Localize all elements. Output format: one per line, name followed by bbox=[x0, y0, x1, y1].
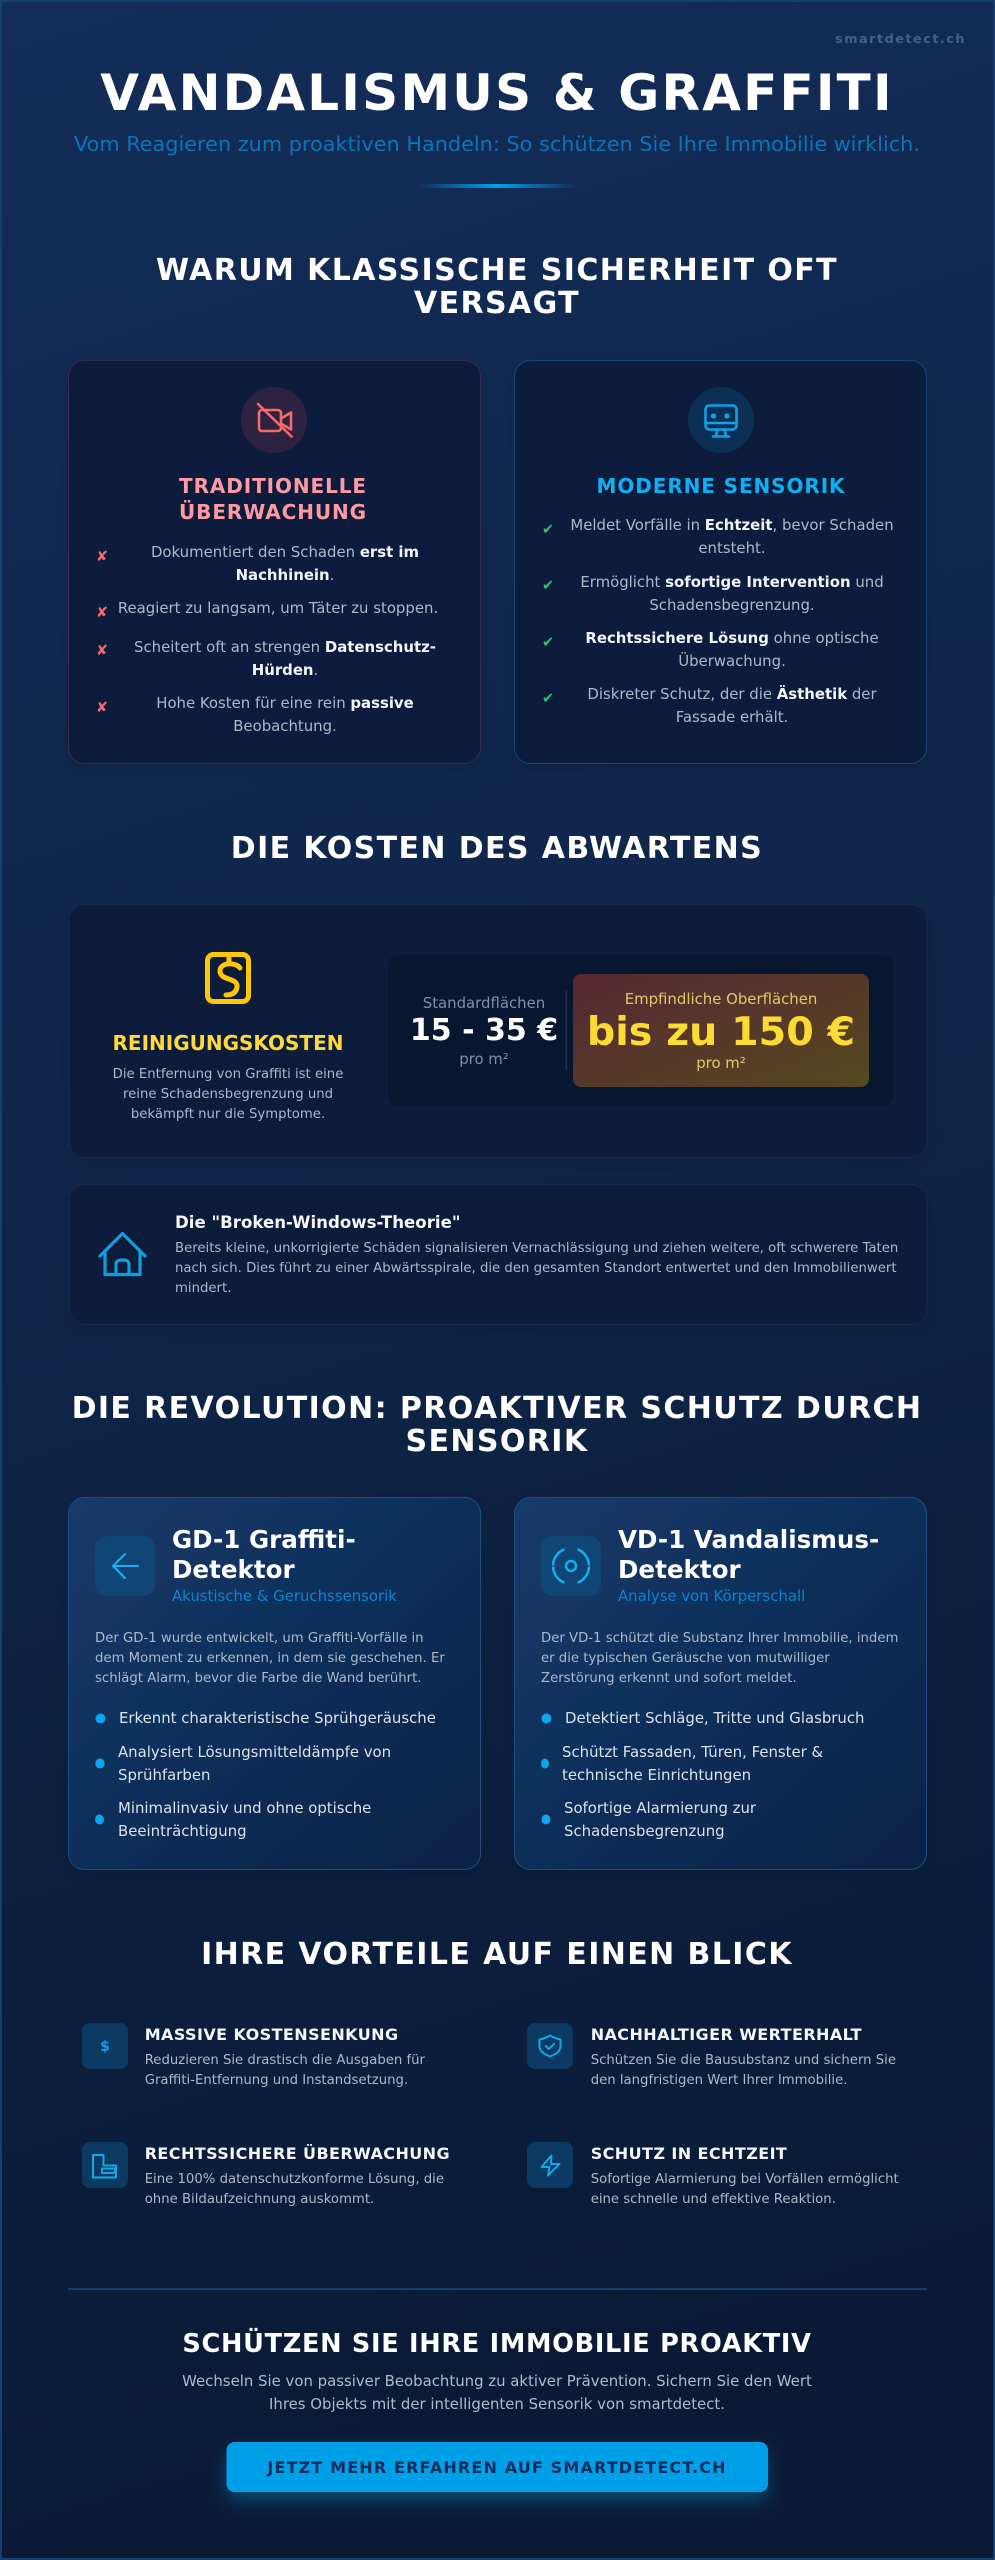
list: drawbacks: ✘ bbox=[96, 605, 108, 621]
theory text: nach sich. Dies führt zu einer Abwärtsspirale, die den gesamten Standort entwertet und den Immobilienwert bbox=[175, 1261, 897, 1276]
theory text bbox=[175, 1241, 898, 1296]
feature list: Sofortige Alarmierung zur bbox=[564, 1799, 757, 1817]
header divider bbox=[417, 184, 577, 188]
benefit: lasting value: Schützen Sie die Bausubstanz und sichern Sie bbox=[591, 2053, 896, 2068]
icon: vibration bbox=[541, 1536, 601, 1596]
feature list: Analysiert Lösungsmitteldämpfe von bbox=[118, 1743, 391, 1761]
icon: dollar: $ bbox=[100, 2039, 110, 2055]
standard surfaces bbox=[410, 994, 558, 1068]
list: advantages bbox=[542, 516, 894, 726]
theory text: mindert. bbox=[175, 1281, 231, 1296]
list: advantages: Fassade erhält. bbox=[676, 708, 788, 726]
benefit: legally compliant: Eine 100% datenschutzkonforme Lösung, die bbox=[145, 2172, 444, 2187]
theory title: Die "Broken-Windows-Theorie" bbox=[175, 1213, 460, 1232]
heading: why classic security fails: WARUM KLASSISCHE SICHERHEIT OFT bbox=[156, 253, 838, 288]
feature list bbox=[541, 1709, 864, 1840]
panel: VD-1 detector bbox=[514, 1498, 926, 1870]
standard surfaces: pro m² bbox=[459, 1050, 509, 1068]
icon: camera off bbox=[241, 387, 307, 453]
list: drawbacks: ✘ bbox=[96, 700, 108, 716]
benefit: lasting value bbox=[527, 2023, 896, 2088]
sensitive surfaces: pro m² bbox=[696, 1054, 746, 1072]
subtitle: Vom Reagieren zum proaktiven Handeln: So schützen Sie Ihre Immobilie wirklich. bbox=[74, 132, 920, 156]
panel: cleaning costs bbox=[69, 904, 927, 1158]
standard surfaces: 15 - 35 € bbox=[410, 1013, 558, 1048]
list: advantages: Meldet Vorfälle in Echtzeit, bevor Schaden bbox=[570, 516, 894, 534]
icon: arrow left bbox=[95, 1536, 155, 1596]
panel: traditional surveillance bbox=[68, 360, 480, 764]
heading: why classic security fails bbox=[156, 253, 838, 321]
benefit: cost reduction bbox=[82, 2023, 426, 2088]
heading: revolution: DIE REVOLUTION: PROAKTIVER SCHUTZ DURCH bbox=[72, 1391, 922, 1426]
card title: ÜBERWACHUNG bbox=[179, 500, 367, 524]
heading: benefits: IHRE VORTEILE AUF EINEN BLICK bbox=[201, 1937, 793, 1972]
list: drawbacks: ✘ bbox=[96, 549, 108, 565]
icon: document bbox=[82, 2142, 128, 2188]
cta text: Wechseln Sie von passiver Beobachtung zu aktiver Prävention. Sichern Sie den Wert bbox=[182, 2372, 812, 2390]
cost description: Die Entfernung von Graffiti ist eine bbox=[113, 1067, 343, 1082]
icon: monitor bbox=[688, 387, 754, 453]
benefit: real-time: eine schnelle und effektive Reaktion. bbox=[591, 2192, 836, 2207]
feature list: Erkennt charakteristische Sprühgeräusche bbox=[119, 1709, 436, 1727]
product description: Der GD-1 wurde entwickelt, um Graffiti-Vorfälle in bbox=[95, 1631, 424, 1646]
price comparison bbox=[388, 955, 893, 1106]
cta text bbox=[182, 2372, 812, 2413]
feature list: Detektiert Schläge, Tritte und Glasbruch bbox=[565, 1709, 864, 1727]
list: drawbacks: ✘ bbox=[96, 643, 108, 659]
heading: why classic security fails: VERSAGT bbox=[414, 286, 580, 321]
benefit: cost reduction: MASSIVE KOSTENSENKUNG bbox=[145, 2025, 399, 2044]
sensitive surfaces: bis zu 150 € bbox=[587, 1009, 855, 1055]
list: advantages: Rechtssichere Lösung ohne optische bbox=[585, 629, 879, 647]
list: drawbacks: Beobachtung. bbox=[233, 717, 337, 735]
list: drawbacks: Hürden. bbox=[252, 661, 318, 679]
benefit: real-time: SCHUTZ IN ECHTZEIT bbox=[591, 2144, 787, 2163]
feature list: technische Einrichtungen bbox=[562, 1766, 751, 1784]
card title: MODERNE SENSORIK bbox=[597, 474, 846, 498]
product title: GD-1 Graffiti- bbox=[172, 1525, 356, 1554]
icon: lightning bbox=[527, 2142, 573, 2188]
product title: VD-1 Vandalismus- bbox=[618, 1525, 879, 1554]
list: drawbacks: Reagiert zu langsam, um Täter zu stoppen. bbox=[118, 599, 438, 617]
cta button bbox=[226, 2442, 768, 2492]
header bbox=[74, 64, 920, 188]
heading: cost of waiting: DIE KOSTEN DES ABWARTENS bbox=[231, 831, 763, 866]
product description: schlägt Alarm, bevor die Farbe die Wand berührt. bbox=[95, 1671, 422, 1686]
list: advantages: Überwachung. bbox=[678, 652, 786, 670]
product title: Akustische & Geruchssensorik bbox=[172, 1587, 397, 1605]
benefit: cost reduction: Graffiti-Entfernung und Instandsetzung. bbox=[145, 2073, 408, 2088]
benefit: real-time bbox=[527, 2142, 899, 2207]
product description bbox=[541, 1631, 898, 1686]
feature list bbox=[95, 1709, 436, 1840]
product title: Detektor bbox=[618, 1555, 742, 1584]
cta title: SCHÜTZEN SIE IHRE IMMOBILIE PROAKTIV bbox=[182, 2328, 812, 2359]
icon: dollar bbox=[82, 2023, 128, 2069]
cta text: Ihres Objekts mit der intelligenten Sensorik von smartdetect. bbox=[269, 2395, 725, 2413]
title: VANDALISMUS & GRAFFITI bbox=[100, 64, 894, 122]
panel: GD-1 detector bbox=[68, 1498, 480, 1870]
feature list: Sprühfarben bbox=[118, 1766, 210, 1784]
benefit: lasting value: den langfristigen Wert Ihrer Immobilie. bbox=[591, 2073, 847, 2088]
feature list: Minimalinvasiv und ohne optische bbox=[118, 1799, 371, 1817]
call to action bbox=[182, 2328, 812, 2492]
list: advantages: Ermöglicht sofortige Intervention und bbox=[580, 573, 884, 591]
card title bbox=[179, 474, 367, 524]
panel: modern sensors bbox=[514, 360, 926, 764]
icon: shield check bbox=[527, 2023, 573, 2069]
list: advantages: ✔ bbox=[542, 522, 554, 538]
product description: er die typischen Geräusche von mutwilliger bbox=[541, 1651, 830, 1666]
feature list: Beeinträchtigung bbox=[118, 1822, 247, 1840]
feature list: Schützt Fassaden, Türen, Fenster & bbox=[562, 1743, 824, 1761]
standard surfaces: Standardflächen bbox=[423, 994, 545, 1012]
cost description: reine Schadensbegrenzung und bbox=[123, 1087, 333, 1102]
benefit: legally compliant: ohne Bildaufzeichnung auskommt. bbox=[145, 2192, 374, 2207]
list: drawbacks bbox=[96, 543, 438, 735]
list: drawbacks: Nachhinein. bbox=[236, 566, 334, 584]
benefit: cost reduction: Reduzieren Sie drastisch die Ausgaben für bbox=[145, 2053, 426, 2068]
list: advantages: ✔ bbox=[542, 691, 554, 707]
icon: house bbox=[100, 1234, 145, 1274]
list: drawbacks: Dokumentiert den Schaden erst im bbox=[151, 543, 419, 561]
list: drawbacks: Hohe Kosten für eine rein passive bbox=[156, 694, 414, 712]
product description: Der VD-1 schützt die Substanz Ihrer Immobilie, indem bbox=[541, 1631, 898, 1646]
list: advantages: ✔ bbox=[542, 578, 554, 594]
list: advantages: ✔ bbox=[542, 635, 554, 651]
panel: broken windows theory bbox=[69, 1184, 927, 1324]
list: advantages: Schadensbegrenzung. bbox=[649, 596, 815, 614]
list: advantages: Diskreter Schutz, der die Ästhetik der bbox=[587, 685, 877, 703]
card title: TRADITIONELLE bbox=[179, 474, 367, 498]
benefit: lasting value: NACHHALTIGER WERTERHALT bbox=[591, 2025, 862, 2044]
benefit: real-time: Sofortige Alarmierung bei Vorfällen ermöglicht bbox=[591, 2172, 899, 2187]
feature list: Schadensbegrenzung bbox=[564, 1822, 725, 1840]
product title: Analyse von Körperschall bbox=[618, 1587, 805, 1605]
brand label: smartdetect.ch bbox=[835, 32, 966, 47]
sensitive surfaces bbox=[573, 974, 869, 1087]
product description: dem Moment zu erkennen, in dem sie geschehen. Er bbox=[95, 1651, 445, 1666]
product description bbox=[95, 1631, 445, 1686]
heading: revolution: SENSORIK bbox=[405, 1424, 589, 1459]
list: drawbacks: Scheitert oft an strengen Datenschutz- bbox=[134, 638, 436, 656]
cta button: JETZT MEHR ERFAHREN AUF SMARTDETECT.CH bbox=[266, 2458, 727, 2477]
heading: revolution bbox=[72, 1391, 922, 1459]
icon: dollar tag bbox=[208, 954, 248, 1002]
product title bbox=[172, 1525, 397, 1605]
theory text: Bereits kleine, unkorrigierte Schäden signalisieren Vernachlässigung und ziehen weitere, oft schwerere Taten bbox=[175, 1241, 898, 1256]
benefit: legally compliant: RECHTSSICHERE ÜBERWACHUNG bbox=[145, 2144, 450, 2163]
product title: Detektor bbox=[172, 1555, 296, 1584]
product title bbox=[618, 1525, 879, 1605]
cost title: REINIGUNGSKOSTEN bbox=[113, 1031, 343, 1055]
sensitive surfaces: Empfindliche Oberflächen bbox=[625, 990, 817, 1008]
product description: Zerstörung erkennt und sofort meldet. bbox=[541, 1671, 797, 1686]
cost description bbox=[113, 1067, 343, 1122]
cost description: bekämpft nur die Symptome. bbox=[131, 1107, 325, 1122]
list: advantages: entsteht. bbox=[698, 539, 766, 557]
benefit: legally compliant bbox=[82, 2142, 450, 2207]
